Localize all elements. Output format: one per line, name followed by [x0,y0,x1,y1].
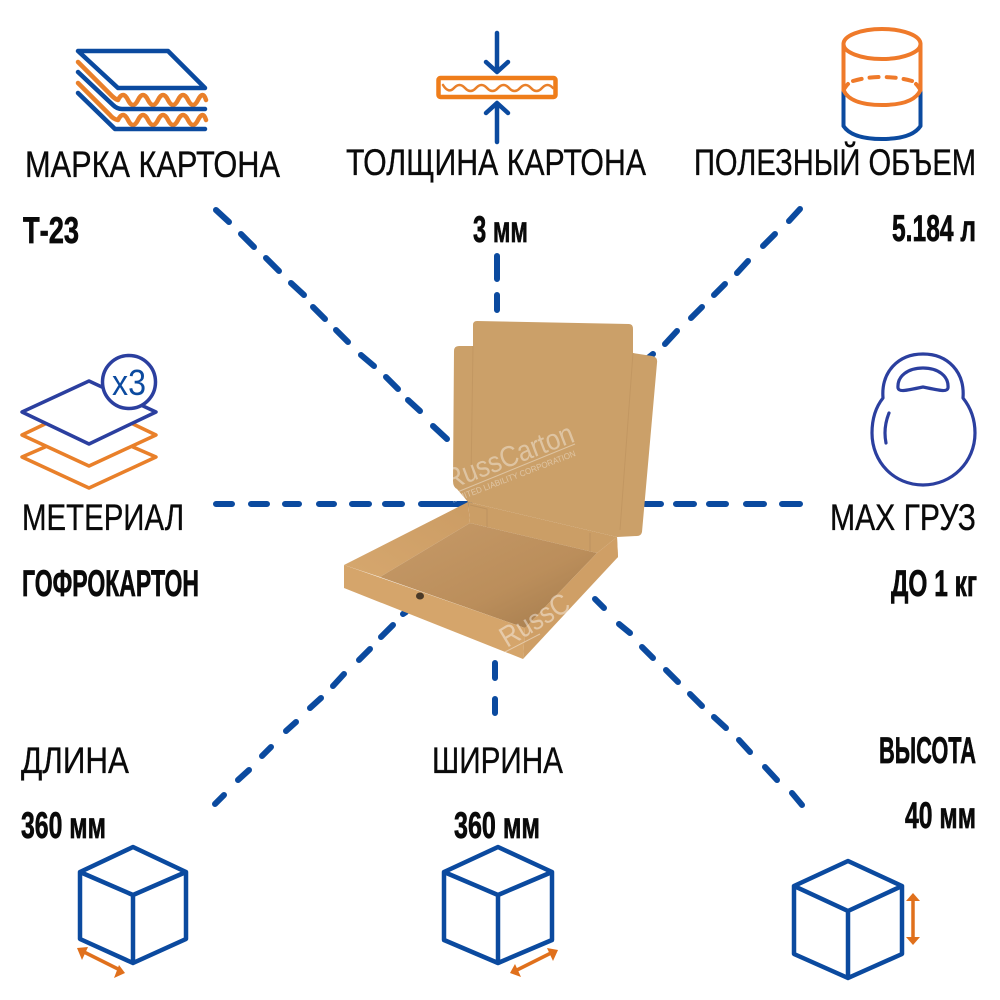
panel: cardboard grade [23,51,280,251]
dashed connector lines [215,209,802,805]
icon: kettlebell [872,354,975,485]
right inner wall [525,537,618,632]
icon: corrugated layers [78,51,206,129]
value: width: 360 мм [454,805,540,846]
watermark on lid: RussCarton [440,418,578,497]
heading: cardboard grade: МАРКА КАРТОНА [25,144,280,185]
box floor [380,523,597,628]
back wall [468,502,617,553]
icon: cube with height arrow [794,861,920,978]
finger hole [416,592,424,600]
watermark on box: RussC [494,587,576,654]
back wall tabs [470,505,590,551]
panel: length [21,740,186,978]
icon: three sheets: x3 [112,362,146,403]
icon: cube with width arrow [444,847,558,977]
heading: cardboard thickness: ТОЛЩИНА КАРТОНА [346,142,646,183]
left inner wall [344,502,470,577]
value: cardboard thickness: 3 мм [473,209,528,250]
pizza box photo [344,321,657,659]
value: cardboard grade: Т-23 [23,210,79,251]
icon: cube with length arrow [77,847,186,978]
value: length: 360 мм [21,805,106,846]
icon: thickness arrows [438,33,556,142]
watermark on lid: LIMITED LIABILITY CORPORATION [450,448,577,505]
panel: cardboard thickness [346,33,646,250]
panel: material [22,356,199,604]
icon: three sheets [22,356,156,488]
lid fold lines [471,346,633,530]
panel: height [794,730,976,978]
heading: width: ШИРИНА [432,740,563,781]
icon: cylinder [844,29,920,139]
heading: length: ДЛИНА [21,740,129,781]
panel: max load [830,354,977,604]
value: material: ГОФРОКАРТОН [22,563,199,604]
right face [523,537,618,659]
open lid [453,321,657,537]
heading: material: МЕТЕРИАЛ [22,497,184,538]
panel: useful volume [694,29,976,249]
front face [344,565,525,659]
panel: width [432,740,563,977]
